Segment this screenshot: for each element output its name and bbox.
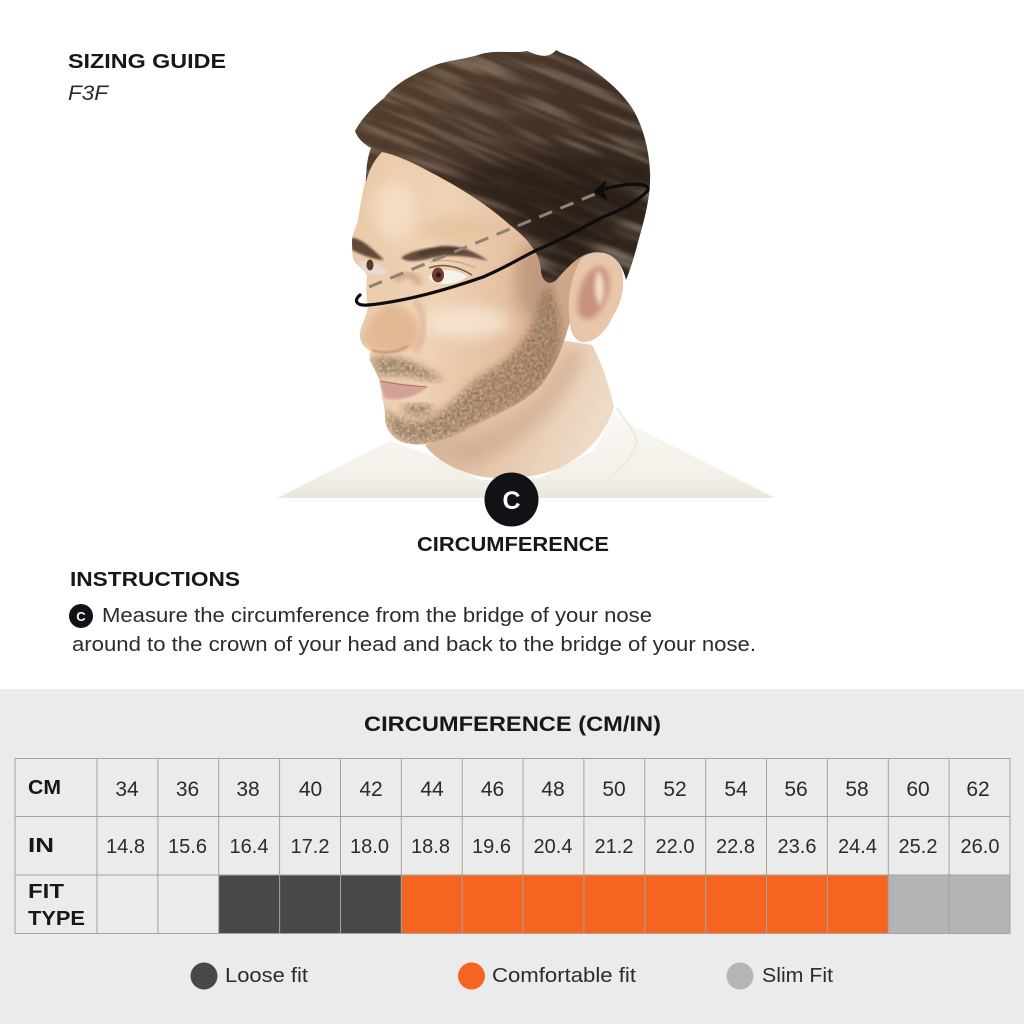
panel: size chart (0, 689, 1024, 1024)
inch values: 16.4 (230, 836, 268, 858)
instructions text (69, 604, 756, 656)
inch values: 14.8 (106, 836, 145, 858)
face (352, 148, 605, 444)
inch values: 24.4 (838, 836, 877, 858)
heading: instructions: INSTRUCTIONS (70, 569, 240, 591)
centimetre values: 50 (602, 778, 626, 801)
fit type colour cells (219, 875, 1010, 933)
centimetre values: 34 (115, 778, 139, 801)
inch values: 18.0 (350, 836, 389, 858)
inch values: 18.8 (411, 836, 450, 858)
shirt (277, 408, 775, 498)
centimetre values: 62 (966, 778, 990, 801)
centimetre values: 44 (420, 778, 444, 801)
row labels: FIT (28, 881, 64, 903)
row labels: TYPE (28, 908, 85, 930)
right eye (428, 270, 468, 284)
marker badge C: C (502, 487, 521, 515)
legend: Comfortable fit (492, 965, 636, 987)
inch values: 23.6 (778, 836, 816, 858)
centimetre values: 40 (299, 778, 322, 801)
inch values: 19.6 (472, 836, 511, 858)
row labels: IN (28, 835, 54, 857)
inch values: 21.2 (595, 836, 633, 858)
dashed guide line (369, 192, 600, 287)
title: sizing guide (68, 51, 226, 105)
inch values: 15.6 (168, 836, 207, 858)
chart title: CIRCUMFERENCE (CM/IN) (364, 713, 661, 736)
inch values (106, 836, 999, 858)
inch values: 22.8 (716, 836, 755, 858)
instructions text: C (76, 609, 86, 624)
instructions text: around to the crown of your head and back to the bridge of your nose. (72, 634, 756, 656)
heading: circumference: CIRCUMFERENCE (417, 534, 609, 556)
centimetre values: 38 (236, 778, 260, 801)
title: sizing guide: F3F (68, 82, 109, 105)
centimetre values: 36 (176, 778, 199, 801)
inch values: 22.0 (656, 836, 694, 858)
centimetre values: 42 (359, 778, 383, 801)
inch values: 17.2 (291, 836, 329, 858)
beard (370, 284, 561, 444)
measuring line with arrow (356, 180, 648, 305)
inch values: 25.2 (899, 836, 937, 858)
legend: Loose fit (225, 965, 308, 987)
marker badge C (484, 472, 538, 526)
neck (425, 340, 614, 478)
legend (190, 962, 833, 990)
title: sizing guide: SIZING GUIDE (68, 51, 226, 73)
hair (355, 50, 650, 283)
centimetre values: 52 (663, 778, 687, 801)
row labels: CM (28, 777, 61, 799)
illustration: head profile with measuring line (278, 50, 774, 498)
ear (569, 253, 623, 342)
centimetre values: 60 (906, 778, 930, 801)
inch values: 20.4 (534, 836, 572, 858)
centimetre values (115, 778, 990, 801)
left eye (358, 261, 389, 275)
centimetre values: 58 (845, 778, 869, 801)
centimetre values: 56 (784, 778, 808, 801)
instructions text: Measure the circumference from the bridge of your nose (102, 605, 652, 627)
row labels (28, 777, 85, 930)
inch values: 26.0 (961, 836, 999, 858)
left brow (350, 238, 384, 260)
right brow (401, 246, 488, 261)
face shading, beard, lips and eyes (350, 180, 561, 444)
hair strand texture (356, 51, 650, 282)
lips (380, 381, 427, 399)
centimetre values: 46 (481, 778, 504, 801)
table grid (15, 758, 1010, 934)
centimetre values: 54 (724, 778, 748, 801)
legend: Slim Fit (762, 965, 833, 987)
centimetre values: 48 (541, 778, 565, 801)
